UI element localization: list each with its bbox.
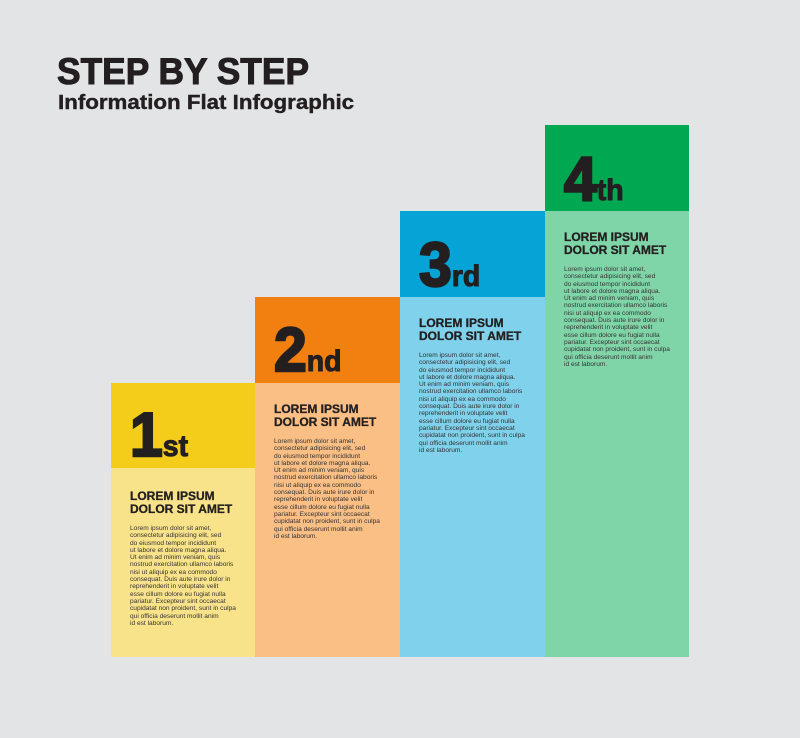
body: 1st: esse cillum dolore eu fugiat nulla xyxy=(130,591,226,598)
panel: step 4 xyxy=(545,125,689,657)
body: 2nd: esse cillum dolore eu fugiat nulla xyxy=(274,504,370,511)
header: 2nd: 2nd xyxy=(274,316,342,385)
body: 2nd: id est laborum. xyxy=(274,533,317,540)
body: 4th: do eiusmod tempor incididunt xyxy=(564,281,650,288)
body: 3rd: consectetur adipisicing elit, sed xyxy=(419,359,510,366)
header: 3rd: 3rd xyxy=(419,231,480,300)
body: 2nd: LOREM IPSUM xyxy=(274,402,359,416)
body: 4th: Lorem ipsum dolor sit amet, xyxy=(564,266,645,273)
body: 3rd: esse cillum dolore eu fugiat nulla xyxy=(419,418,515,425)
body: 4th: ut labore et dolore magna aliqua. xyxy=(564,288,660,295)
body: 3rd: Lorem ipsum dolor sit amet, xyxy=(419,352,500,359)
header: 4th xyxy=(545,125,689,211)
body: 4th: pariatur. Excepteur sint occaecat xyxy=(564,339,660,346)
body: 1st xyxy=(111,468,255,657)
body: 2nd: consequat. Duis aute irure dolor in xyxy=(274,489,374,496)
body: 1st: consectetur adipisicing elit, sed xyxy=(130,532,221,539)
body: 4th: nostrud exercitation ullamco laboris xyxy=(564,302,667,309)
header: 2nd xyxy=(255,297,400,383)
body: 3rd: LOREM IPSUM xyxy=(419,316,504,330)
panel: step 1 xyxy=(111,383,255,657)
body: 1st: nisi ut aliquip ex ea commodo xyxy=(130,569,217,576)
body: 1st: qui officia deserunt mollit anim xyxy=(130,613,219,620)
body: 1st: DOLOR SIT AMET xyxy=(130,502,232,516)
body: 3rd: consequat. Duis aute irure dolor in xyxy=(419,403,519,410)
body: 4th: cupidatat non proident, sunt in culpa xyxy=(564,346,670,353)
header: 1st: 1st xyxy=(130,401,188,470)
body: 2nd: Lorem ipsum dolor sit amet, xyxy=(274,438,355,445)
body: 2nd: DOLOR SIT AMET xyxy=(274,415,376,429)
body: 3rd: DOLOR SIT AMET xyxy=(419,329,521,343)
body: 3rd: nostrud exercitation ullamco laboris xyxy=(419,388,522,395)
body: 3rd xyxy=(400,297,545,657)
body: 1st: pariatur. Excepteur sint occaecat xyxy=(130,598,226,605)
title: STEP BY STEP xyxy=(57,51,309,92)
body: 3rd: qui officia deserunt mollit anim xyxy=(419,440,508,447)
body: 2nd: cupidatat non proident, sunt in culpa xyxy=(274,518,380,525)
body: 3rd: Ut enim ad minim veniam, quis xyxy=(419,381,509,388)
body: 3rd: id est laborum. xyxy=(419,447,462,454)
body: 1st: ut labore et dolore magna aliqua. xyxy=(130,547,226,554)
body: 2nd: Ut enim ad minim veniam, quis xyxy=(274,467,364,474)
body: 3rd: pariatur. Excepteur sint occaecat xyxy=(419,425,515,432)
subtitle: Information Flat Infographic xyxy=(58,92,354,114)
body: 1st: do eiusmod tempor incididunt xyxy=(130,540,216,547)
body: 2nd: ut labore et dolore magna aliqua. xyxy=(274,460,370,467)
body: 1st: reprehenderit in voluptate velit xyxy=(130,583,218,590)
body: 3rd: reprehenderit in voluptate velit xyxy=(419,410,507,417)
body: 3rd: nisi ut aliquip ex ea commodo xyxy=(419,396,506,403)
body: 3rd: do eiusmod tempor incididunt xyxy=(419,367,505,374)
body: 4th: consequat. Duis aute irure dolor in xyxy=(564,317,664,324)
body: 3rd: ut labore et dolore magna aliqua. xyxy=(419,374,515,381)
body: 2nd: reprehenderit in voluptate velit xyxy=(274,496,362,503)
body: 4th: esse cillum dolore eu fugiat nulla xyxy=(564,332,660,339)
header: 3rd xyxy=(400,211,545,297)
body: 2nd: do eiusmod tempor incididunt xyxy=(274,453,360,460)
body: 4th: DOLOR SIT AMET xyxy=(564,243,666,257)
header: 1st xyxy=(111,383,255,468)
body: 4th: nisi ut aliquip ex ea commodo xyxy=(564,310,651,317)
body: 1st: Ut enim ad minim veniam, quis xyxy=(130,554,220,561)
body: 2nd: pariatur. Excepteur sint occaecat xyxy=(274,511,370,518)
body: 2nd: qui officia deserunt mollit anim xyxy=(274,526,363,533)
body: 1st: cupidatat non proident, sunt in culpa xyxy=(130,605,236,612)
panel: step 2 xyxy=(255,297,400,657)
body: 4th: id est laborum. xyxy=(564,361,607,368)
body: 2nd xyxy=(255,383,400,657)
body: 2nd: consectetur adipisicing elit, sed xyxy=(274,445,365,452)
body: 4th: LOREM IPSUM xyxy=(564,230,649,244)
body: 4th: qui officia deserunt mollit anim xyxy=(564,354,653,361)
body: 4th: reprehenderit in voluptate velit xyxy=(564,324,652,331)
body: 2nd: nisi ut aliquip ex ea commodo xyxy=(274,482,361,489)
panel: step 3 xyxy=(400,211,545,657)
body: 3rd: cupidatat non proident, sunt in culpa xyxy=(419,432,525,439)
body: 1st: id est laborum. xyxy=(130,620,173,627)
body: 1st: nostrud exercitation ullamco laboris xyxy=(130,561,233,568)
body: 4th xyxy=(545,211,689,657)
body: 1st: LOREM IPSUM xyxy=(130,489,215,503)
body: 4th: consectetur adipisicing elit, sed xyxy=(564,273,655,280)
body: 4th: Ut enim ad minim veniam, quis xyxy=(564,295,654,302)
body: 1st: consequat. Duis aute irure dolor in xyxy=(130,576,230,583)
header: 4th: 4th xyxy=(564,145,624,214)
body: 2nd: nostrud exercitation ullamco laboris xyxy=(274,474,377,481)
body: 1st: Lorem ipsum dolor sit amet, xyxy=(130,525,211,532)
